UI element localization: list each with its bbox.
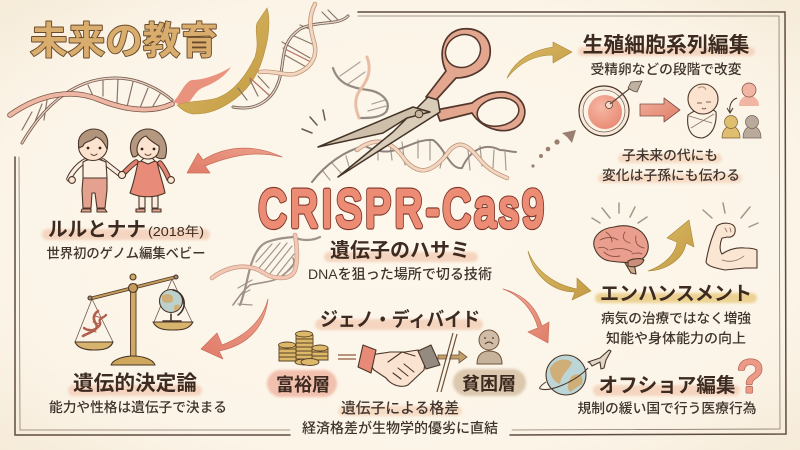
heading: germline editing: 生殖細胞系列編集: [582, 34, 750, 57]
text: offshore description: 規制の緩い国で行う医療行為: [578, 400, 756, 416]
title: 未来の教育: [30, 21, 218, 63]
boy: [69, 129, 121, 212]
icon: dna on scale: [83, 311, 106, 336]
arrow: up gold: [648, 220, 694, 271]
arrow: to kids: [187, 148, 282, 173]
arrow: dotted: [531, 130, 576, 168]
heading: geno divide: ジェノ・ディバイド: [320, 308, 480, 331]
heading: enhancement: エンハンスメント: [600, 283, 752, 305]
arrow: to enhancement: [528, 251, 591, 300]
girl: [118, 129, 174, 212]
icon: poor person: [477, 330, 502, 364]
icon: muscle arm: [703, 203, 758, 270]
heading: lulu and nana: ルルとナナ: [48, 219, 146, 241]
heading: genetic determinism: 遺伝的決定論: [73, 372, 198, 395]
icon: handshake: [358, 345, 440, 386]
text: scissors description: DNAを狙った場所で切る技術: [308, 266, 492, 282]
pill: wealthy: 富裕層: [276, 375, 330, 395]
heading: genetic scissors: 遺伝子のハサミ: [330, 239, 470, 262]
icon: scissors: [318, 28, 525, 177]
heading: lulu and nana: [42, 219, 210, 241]
arrow: to offshore: [503, 289, 549, 343]
text: next generations: [598, 148, 742, 183]
handle lower: [436, 92, 525, 131]
icon: brain: [592, 203, 648, 274]
icon: fertilized egg: [579, 81, 642, 136]
icon: spark lines: [302, 110, 325, 133]
DNA behind scissors: [333, 57, 388, 118]
icon: globe and plane: [540, 350, 611, 395]
DNA ribbon top left: [10, 67, 231, 143]
icon: descendants: [722, 83, 761, 138]
icon: globe on scale: [160, 290, 184, 321]
icon: baby: [688, 84, 718, 138]
icon: coins: [278, 331, 328, 366]
text: enhancement description: [601, 310, 751, 346]
icon: question mark: ?: [737, 351, 763, 402]
arrow: to determinism: [201, 299, 268, 359]
text: germline description: 受精卵などの段階で改変: [590, 61, 742, 77]
text: determinism description: 能力や性格は遺伝子で決まる: [49, 400, 227, 415]
icon: scales: [75, 274, 193, 365]
heading: offshore editing: オフショア編集: [598, 374, 736, 397]
text: next generations: 子未来の代にも: [622, 148, 718, 163]
text: disparity description: 経済格差が生物学的優劣に直結: [302, 420, 498, 436]
heading: CRISPR-Cas9: CRISPR-Cas9: [259, 180, 547, 238]
DNA lower left: [212, 235, 320, 305]
gold ribbon: [177, 8, 269, 114]
icon: blocked arrow: [437, 333, 467, 392]
arrow: gold top right: [507, 42, 572, 78]
pill: wealthy: [267, 370, 337, 397]
icon: children: [69, 129, 174, 212]
pill: poor: 貧困層: [462, 374, 516, 394]
icon: question mark: ?: [737, 351, 763, 402]
blades: [338, 97, 440, 177]
handle upper: [426, 28, 490, 100]
text: next generations: 変化は子孫にも伝わる: [602, 168, 740, 183]
text: lulu and nana description: 世界初のゲノム編集ベビー: [46, 246, 206, 261]
arrow: pink: [640, 98, 680, 122]
heading: CRISPR-Cas9: CRISPR-Cas9: [259, 180, 547, 238]
pill: poor: [453, 369, 526, 396]
DNA lower: [312, 140, 516, 182]
DNA helix top center: [233, 4, 348, 108]
heading: genetic disparity: 遺伝子による格差: [341, 400, 459, 417]
text: enhancement description: 知能や身体能力の向上: [606, 330, 746, 346]
icon: equals: [338, 355, 356, 359]
heading: lulu and nana: (2018年): [148, 224, 204, 239]
text: enhancement description: 病気の治療ではなく増強: [601, 310, 751, 326]
